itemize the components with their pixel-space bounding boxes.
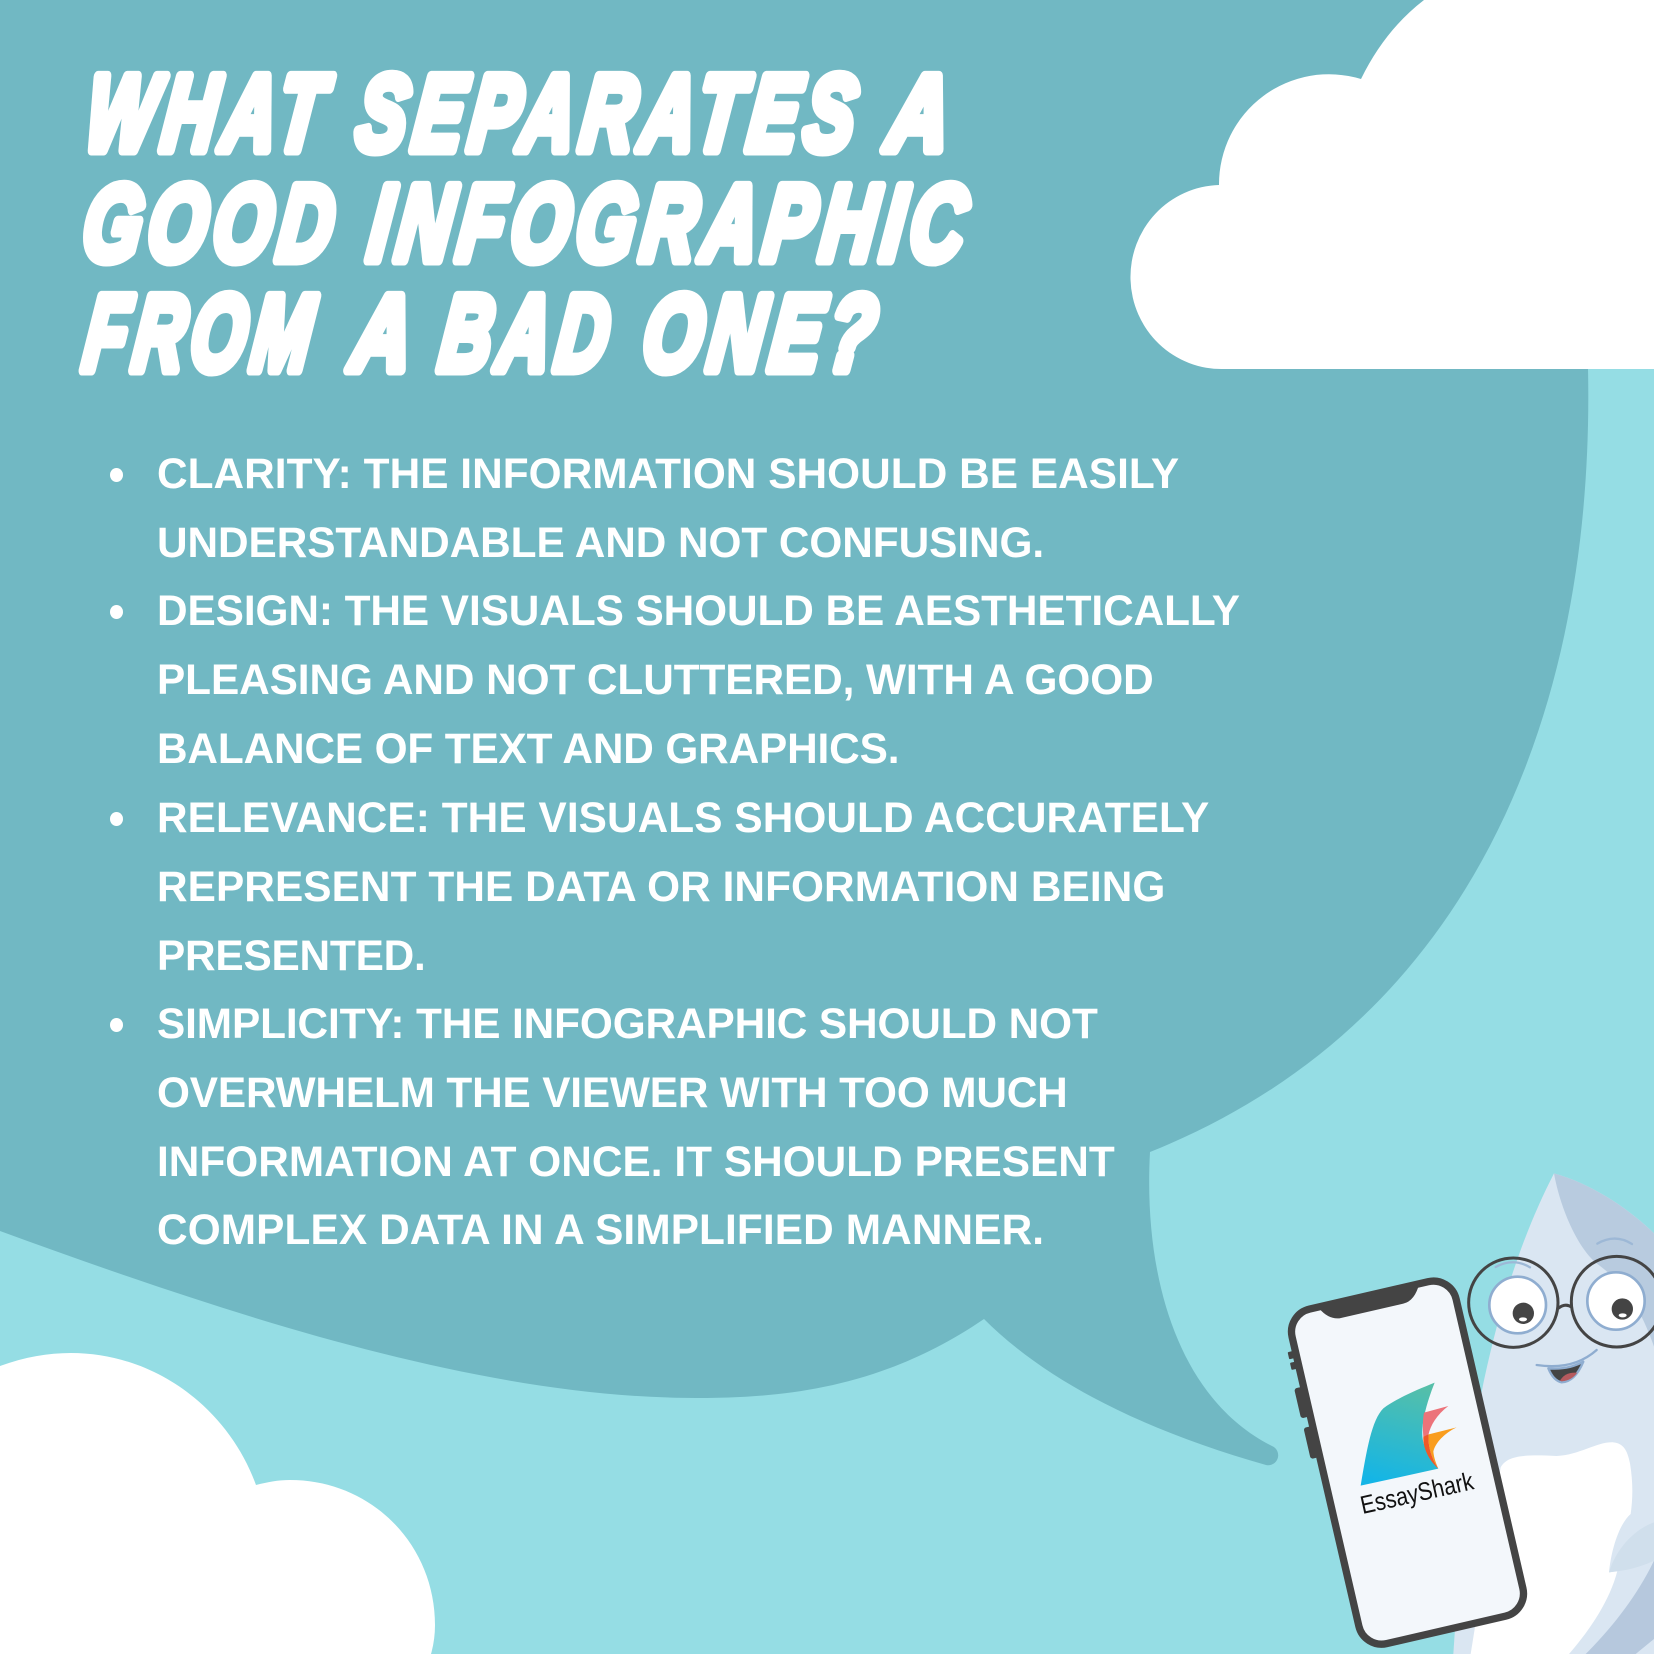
logo sail [1361,1383,1438,1486]
phone side buttons [1288,1351,1318,1459]
bullet: clarity: CLARITY: THE INFORMATION SHOULD BE EASILY [157,450,1179,497]
title: BAD [434,273,623,393]
bullet: design: DESIGN: THE VISUALS SHOULD BE AESTHETICALLY [157,587,1240,634]
bullet: simplicity: OVERWHELM THE VIEWER WITH TOO MUCH [157,1069,1068,1116]
title: A [880,53,965,173]
title: GOOD [77,163,348,283]
title: ONE? [637,273,890,393]
logo red fin [1423,1406,1448,1437]
bullet: simplicity: INFORMATION AT ONCE. IT SHOULD PRESENT [157,1138,1115,1184]
glasses [1469,1256,1654,1347]
title: FROM [78,273,326,393]
bullet: relevance [110,794,1209,978]
mouth [1537,1350,1597,1382]
shark belly [1471,1442,1632,1654]
bullet: simplicity: SIMPLICITY: THE INFOGRAPHIC SHOULD NOT [157,1000,1098,1047]
bullet: simplicity [110,1000,1115,1253]
title: WHAT [80,53,338,173]
bullet: simplicity: COMPLEX DATA IN A SIMPLIFIED MANNER. [157,1206,1044,1253]
shark body [1453,1173,1654,1654]
title: INFOGRAPHIC [363,163,980,283]
phone notch [1319,1283,1419,1318]
bullet: clarity [110,450,1179,566]
cloud: bottom left [0,1353,435,1654]
logo orange fin [1429,1427,1457,1469]
title: A [344,273,427,393]
title: SEPARATES [351,53,870,173]
bullet: relevance: PRESENTED. [157,932,426,978]
phone frame [1287,1276,1528,1649]
shark mascot holding phone [1287,1173,1654,1654]
bullet: design: BALANCE OF TEXT AND GRAPHICS. [157,724,899,772]
left eye [1489,1277,1546,1333]
bullet: relevance: REPRESENT THE DATA OR INFORMATION BEING [157,863,1165,910]
eyebrows [1496,1239,1632,1267]
shark fin [1609,1522,1654,1572]
bullet: relevance: RELEVANCE: THE VISUALS SHOULD ACCURATELY [157,794,1209,841]
title [77,53,980,393]
bullet: clarity: UNDERSTANDABLE AND NOT CONFUSING. [157,519,1044,566]
phone [1287,1276,1528,1649]
right eye [1587,1272,1645,1330]
shark dorsal shading [1554,1173,1654,1347]
logo wordmark: EssayShark [1358,1467,1476,1520]
logo overlap [1423,1434,1438,1469]
shark tail shading [1586,1561,1654,1654]
bullet: design [110,587,1240,772]
cloud: top right [1130,0,1654,369]
bullet: design: PLEASING AND NOT CLUTTERED, WITH A GOOD [157,656,1154,703]
